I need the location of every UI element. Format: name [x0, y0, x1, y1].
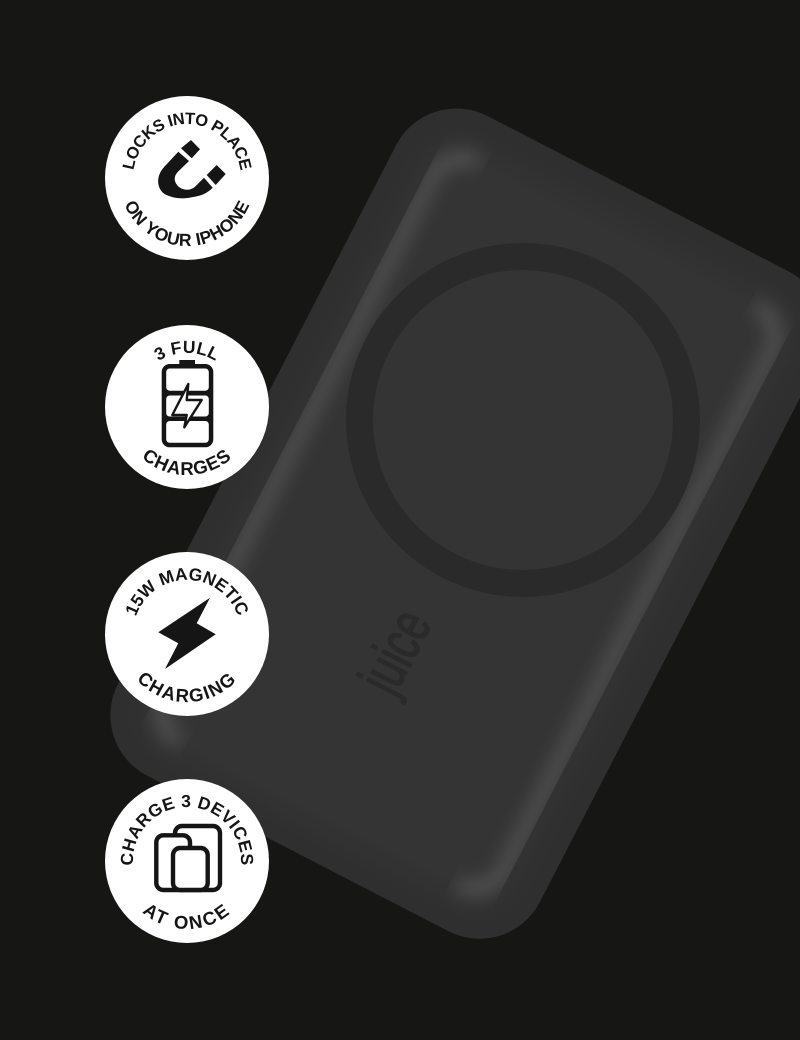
label: at once: AT ONCE [142, 904, 230, 930]
label: on your iphone: ON YOUR IPHONE [126, 200, 250, 246]
label: 3 full: 3 FULL [154, 340, 216, 361]
badge: 3 full charges [105, 325, 269, 489]
icon: lightning outline [172, 384, 202, 427]
badge: 15w magnetic charging [105, 552, 269, 716]
label: charges: CHARGES [144, 450, 230, 475]
icon: battery [162, 360, 213, 447]
icon: magnet [158, 140, 226, 198]
label: charge 3 devices: CHARGE 3 DEVICES [120, 794, 254, 865]
label: 15w magnetic: 15W MAGNETIC [126, 568, 248, 616]
magnetic ring [346, 243, 700, 597]
badge: locks into place [105, 96, 269, 260]
device body [87, 85, 800, 962]
icon: lightning bolt [158, 598, 216, 669]
badge: charge 3 devices at once [105, 779, 269, 943]
icon: three devices [156, 826, 220, 890]
label: locks into place: LOCKS INTO PLACE [122, 112, 252, 170]
label: charging: CHARGING [139, 673, 234, 702]
power bank device [87, 85, 800, 962]
juice logo: juice [345, 599, 444, 705]
